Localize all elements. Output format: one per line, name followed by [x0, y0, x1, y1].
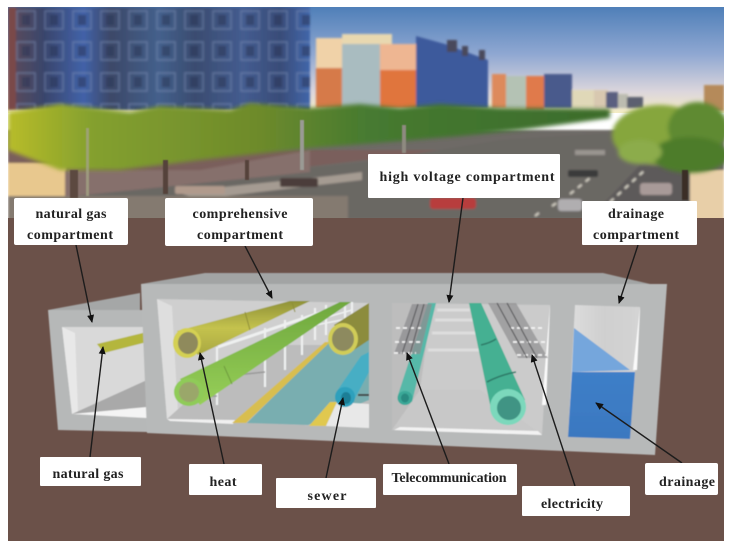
- label: comprehensive compartment: [165, 198, 313, 246]
- natural gas compartment shell: [48, 293, 147, 432]
- comprehensive compartment: [157, 299, 369, 428]
- label: sewer: sewer: [308, 489, 346, 504]
- label: high voltage compartment: high voltage compartment: [380, 170, 555, 185]
- right olive pipe: [328, 303, 369, 355]
- right cable trays: [488, 303, 548, 358]
- label: heat: [189, 464, 262, 495]
- label: natural gas compartment: compartment: [27, 228, 113, 243]
- telecommunication pipe: [398, 303, 436, 405]
- arrow: natural gas: [90, 347, 103, 457]
- label: electricity: electricity: [541, 497, 603, 512]
- label: natural gas compartment: [14, 198, 128, 245]
- main box outer shell: [141, 273, 667, 455]
- label: natural gas: natural gas: [52, 467, 124, 482]
- label: drainage: drainage: [659, 475, 715, 490]
- tunnel cross-section: [48, 273, 667, 455]
- arrow: comprehensive compartment: [245, 246, 272, 298]
- label: high voltage compartment: [368, 154, 560, 198]
- arrow: sewer: [326, 398, 343, 478]
- label: comprehensive compartment: compartment: [197, 228, 283, 243]
- label: Telecommunication: [383, 464, 517, 495]
- water front face: [568, 372, 635, 439]
- street and sidewalk: [8, 130, 724, 220]
- water surface: [572, 328, 630, 372]
- high voltage compartment: [392, 303, 550, 435]
- heat pipe: green: [174, 302, 351, 406]
- label: heat: heat: [210, 475, 237, 490]
- arrow: drainage compartment: [619, 245, 638, 303]
- floor channel with yellow edge lines: [232, 340, 369, 428]
- tall blue apartment towers: [8, 7, 310, 110]
- sewer pipe: [335, 352, 369, 407]
- electricity pipe: [469, 303, 526, 425]
- arrow: natural gas compartment: [76, 245, 92, 322]
- callout arrows: [76, 198, 682, 486]
- label: drainage: [645, 463, 718, 495]
- label: natural gas compartment: natural gas: [36, 207, 107, 222]
- heat pipe: yellow: [173, 301, 310, 358]
- arrow: telecommunication: [407, 353, 449, 464]
- mid-distance apartment blocks: [316, 34, 724, 111]
- label: sewer: [276, 478, 376, 508]
- label: Telecommunication: Telecommunication: [392, 471, 507, 486]
- underground earth: [8, 218, 724, 541]
- arrow: heat: [200, 353, 224, 464]
- left cable trays: [394, 304, 432, 354]
- arrow: high voltage compartment: [449, 198, 463, 302]
- drainage compartment: [568, 305, 640, 439]
- label: electricity: [522, 486, 630, 516]
- arrow: drainage: [596, 403, 682, 463]
- natural gas pipe: [97, 332, 147, 353]
- white support racks: [190, 302, 352, 405]
- roadside tree row: [8, 102, 728, 173]
- label: drainage compartment: [582, 201, 697, 245]
- sky: [8, 7, 724, 113]
- label: comprehensive compartment: comprehensive: [192, 207, 288, 222]
- label: drainage compartment: compartment: [593, 228, 679, 243]
- arrow: electricity: [532, 355, 575, 486]
- label: drainage compartment: drainage: [608, 207, 664, 222]
- tree trunks and lamp posts: [70, 120, 688, 200]
- label: natural gas: [40, 457, 141, 486]
